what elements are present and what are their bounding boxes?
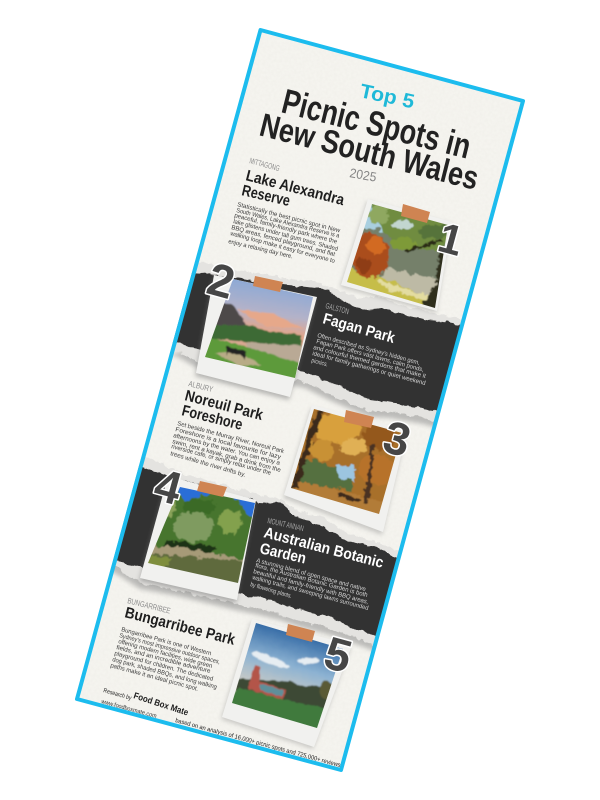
text block: Fagan Park: and colourful themed gardens that make it [312,344,427,380]
text block: Bungarribee Park: Bungarribee Park [123,604,237,649]
text block: Noreuil Park Foreshore: trees while the river drifts by. [169,450,247,479]
paper grain [70,25,530,775]
text block: Noreuil Park Foreshore: ALBURY [188,379,214,394]
polaroid 4 [138,480,256,604]
text block: Australian Botanic Garden [249,516,386,612]
text block: Bungarribee Park: fields, and an incredible adventure [116,644,212,675]
title line 2: New South Wales [256,106,483,197]
text block: Fagan Park: picnics. [310,357,329,368]
year: 2025 [348,165,378,185]
polaroid 2 tape [253,276,283,292]
photo: tropical garden pond [148,487,255,583]
text block: Australian Botanic Garden: Garden [258,540,308,567]
number 4: 4 [149,458,188,515]
title line 1: Picnic Spots in [278,82,475,166]
text block: Fagan Park: Fagan Park [321,310,397,347]
text block: Bungarribee Park: dog park, shaded BBQs, and long walking [111,656,218,691]
text block: Bungarribee Park [109,596,237,693]
footer: www.foodboxmate.com [100,699,157,720]
photo: lake and bench at sunset [205,279,313,378]
text block: Lake Alexandra Reserve: Reserve [240,182,292,210]
text block: Fagan Park: ideal for family gatherings or quiet weekend [311,350,427,387]
number 5: 5 [319,626,357,683]
text block: Australian Botanic Garden: by flowering plants. [249,581,293,600]
polaroid 5 [220,620,352,750]
text block: Bungarribee Park: Sydney's most impressive outdoor spaces, [118,632,221,666]
footer: based on an analysis of 16,000+ picnic spots and 725,000+ reviews [174,717,341,769]
photo: autumn trees and picnic tables [291,409,402,514]
number 1: 1 [433,213,468,265]
photo: lake with autumn tree [347,204,448,308]
text block: Fagan Park: Fagan Park offers vast lawns, calm ponds, [315,338,425,374]
polaroid 2 [193,275,317,402]
text block: Noreuil Park Foreshore: afternoons by the water. You can enjoy a [172,432,281,467]
number 2: 2 [202,252,240,309]
text block: Fagan Park: Often described as Sydney's hidden gem, [316,332,421,367]
text block: Australian Botanic Garden: MOUNT ANNAN [267,516,305,533]
text block: Noreuil Park Foreshore [169,379,285,479]
text block: Australian Botanic Garden: A stunning blend of open space and native [255,557,367,593]
text block: Bungarribee Park: playground for children. The dedicated [113,650,214,683]
blue border [77,30,523,770]
polaroid 4 tape [197,481,227,497]
text block: Bungarribee Park: Bungarribee Park is one of Western [120,626,213,657]
text block: Noreuil Park Foreshore: Noreuil Park [183,387,265,424]
text block: Lake Alexandra Reserve: MITTAGONG [248,156,281,173]
text block: Noreuil Park Foreshore: Set beside the Murray River, Noreuil Park [176,420,285,455]
text block: Noreuil Park Foreshore: riverside cafe, or simply relax under the [170,443,272,477]
title kicker: Top 5 [358,80,416,113]
polaroid 1 [339,200,448,314]
text block: Noreuil Park Foreshore: Foreshore [180,402,245,434]
text block: Australian Botanic Garden: Australian Botanic [262,524,386,572]
footer [100,687,341,769]
text block: Lake Alexandra Reserve: South Wales, Lake Alexandra Reserve is a [236,207,341,240]
text block: Australian Botanic Garden: walking trails, and sweeping lawns surrounded [251,574,370,612]
text block: Noreuil Park Foreshore: swim, rent a kayak, grab a drink from the [171,438,282,474]
number 3: 3 [378,410,416,467]
text block: Lake Alexandra Reserve: Statistically the best picnic spot in New [236,201,341,235]
infographic [74,28,525,772]
torn dark band 1 [170,262,470,430]
text block: Lake Alexandra Reserve: peaceful, family-friendly park where the [233,212,338,246]
text block: Noreuil Park Foreshore: Foreshore is a local favourite for lazy [174,426,283,461]
photo: colourful playground under blue sky [232,623,343,728]
text block: Lake Alexandra Reserve: Lake Alexandra [244,167,346,209]
polaroid 3 tape [344,410,374,428]
footer: Food Box Mate [132,690,190,718]
text block: Fagan Park [310,301,427,387]
text block: Bungarribee Park: BUNGARRIBEE [127,596,171,616]
title [256,80,483,197]
text block: Bungarribee Park: paths make it an ideal picnic spot. [109,662,199,693]
paper card [77,30,523,770]
text block: Lake Alexandra Reserve: walking loop make it easy for everyone to [229,230,336,265]
text block: Lake Alexandra Reserve: enjoy a relaxing day here. [228,238,294,260]
polaroid 5 tape [286,624,315,642]
text block: Lake Alexandra Reserve [228,156,346,265]
polaroid 1 tape [401,204,430,223]
text block: Fagan Park: GALSTON [324,301,350,316]
text block: Australian Botanic Garden: flora, the Australian Botanic Garden is both [254,562,369,599]
text block: Lake Alexandra Reserve: BBQ areas, fenced playground, and flat [230,224,336,258]
text block: Australian Botanic Garden: beautiful and family-friendly with BBQ areas, [252,568,369,606]
footer: Research by [102,687,133,702]
text block: Bungarribee Park: offering modern facilities, wide green [117,638,214,670]
torn dark band 2 [105,453,410,656]
polaroid 3 [282,408,406,536]
text block: Lake Alexandra Reserve: lake glistens under tall gum trees. Shaded [232,218,339,253]
